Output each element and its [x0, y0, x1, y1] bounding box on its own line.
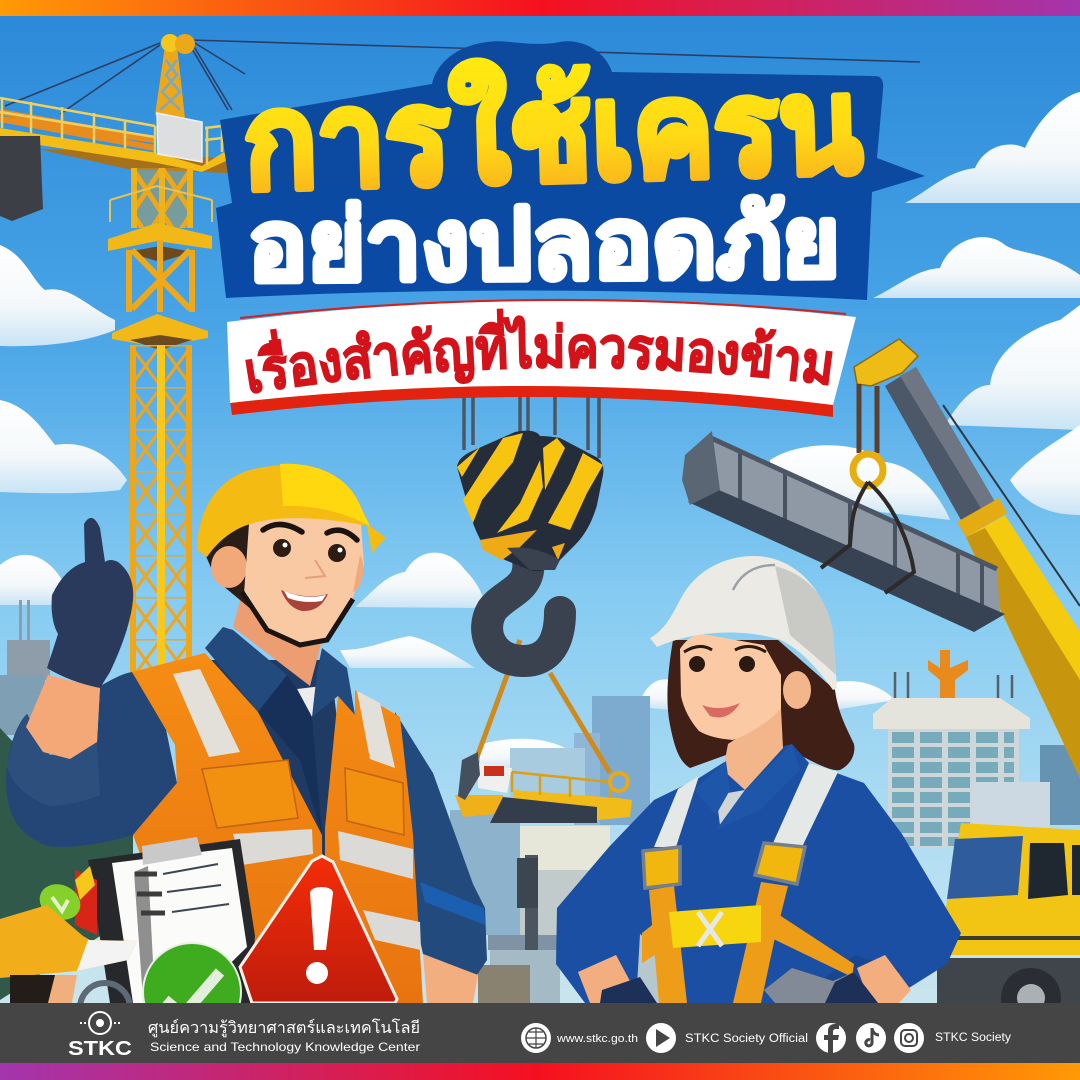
subtitle ribbon [227, 298, 856, 417]
footer bar [0, 1003, 1080, 1063]
hook block [854, 339, 918, 386]
torso shirt [205, 660, 350, 1003]
top gradient bar [0, 0, 1080, 16]
blue work shirt [556, 744, 961, 1003]
website label: www.stkc.go.th [556, 1033, 638, 1045]
left sleeve [6, 672, 177, 847]
icon: warning triangle [240, 856, 397, 1003]
yellow hard hat [197, 465, 386, 557]
icon: green check badge [143, 943, 241, 1041]
social label: STKC Society [935, 1032, 1011, 1044]
footer bar: Science and Technology Knowledge Center [150, 1040, 420, 1054]
eyes and brows [263, 524, 357, 578]
icon: play [646, 1023, 676, 1053]
main banner: blue title plate [216, 41, 925, 300]
harness straps [654, 763, 838, 847]
eyes and smile [684, 646, 766, 717]
hanging platform [455, 752, 632, 823]
mid mast [108, 168, 212, 350]
shackle and sling [821, 454, 914, 593]
pointing glove [47, 518, 133, 688]
ropes [464, 392, 599, 458]
face [680, 634, 781, 740]
icon: instagram [894, 1023, 924, 1053]
crane cables [5, 40, 920, 114]
central crane hook [455, 392, 632, 823]
white hard hat [650, 556, 837, 690]
slings [477, 640, 610, 773]
collar [694, 744, 800, 830]
title line 1: การใช้เครน [242, 50, 864, 216]
orange safety vest [132, 653, 423, 1003]
upper mast [155, 34, 195, 118]
footer logo: STKC [68, 1038, 132, 1060]
icon: facebook [816, 1023, 846, 1053]
crane jib [0, 98, 228, 221]
title line 2: อย่างปลอดภัย [247, 187, 840, 301]
boom [885, 367, 995, 520]
ear and hair [202, 515, 252, 610]
female worker [556, 556, 961, 1003]
clouds [0, 92, 1080, 770]
smile [281, 590, 328, 611]
neck [233, 600, 340, 686]
face [244, 510, 364, 645]
white t-shirt [297, 686, 322, 717]
male worker [6, 464, 487, 1003]
tower crane [0, 34, 920, 675]
hook block [457, 431, 603, 571]
hair [667, 640, 854, 770]
small worker [0, 866, 137, 1033]
forearm [26, 675, 100, 759]
right arm [395, 712, 487, 975]
tall building with orange crane top [873, 650, 1050, 850]
collar [205, 627, 355, 717]
skyline buildings [0, 600, 1080, 1003]
footer organisation name: ศูนย์ความรู้วิทยาศาสตร์และเทคโนโลยี [148, 1018, 420, 1038]
footer logo [68, 1012, 132, 1060]
mobile crane boom and steel beam [682, 339, 1080, 778]
youtube label: STKC Society Official [685, 1033, 808, 1045]
yellow truck [937, 823, 1080, 1028]
beard line [242, 592, 353, 645]
bottom gradient bar [0, 1063, 1080, 1080]
hands and gloves [578, 955, 630, 1003]
subtitle text: เรื่องสำคัญที่ไม่ควรมองข้าม [245, 308, 833, 394]
icon: globe [521, 1023, 551, 1053]
lower mast [130, 345, 192, 675]
hook [487, 560, 560, 661]
steel beam [682, 431, 1005, 632]
neck [723, 709, 783, 790]
icon: tiktok [856, 1023, 886, 1053]
harness buckles [643, 847, 680, 888]
clipboard [88, 837, 255, 1003]
